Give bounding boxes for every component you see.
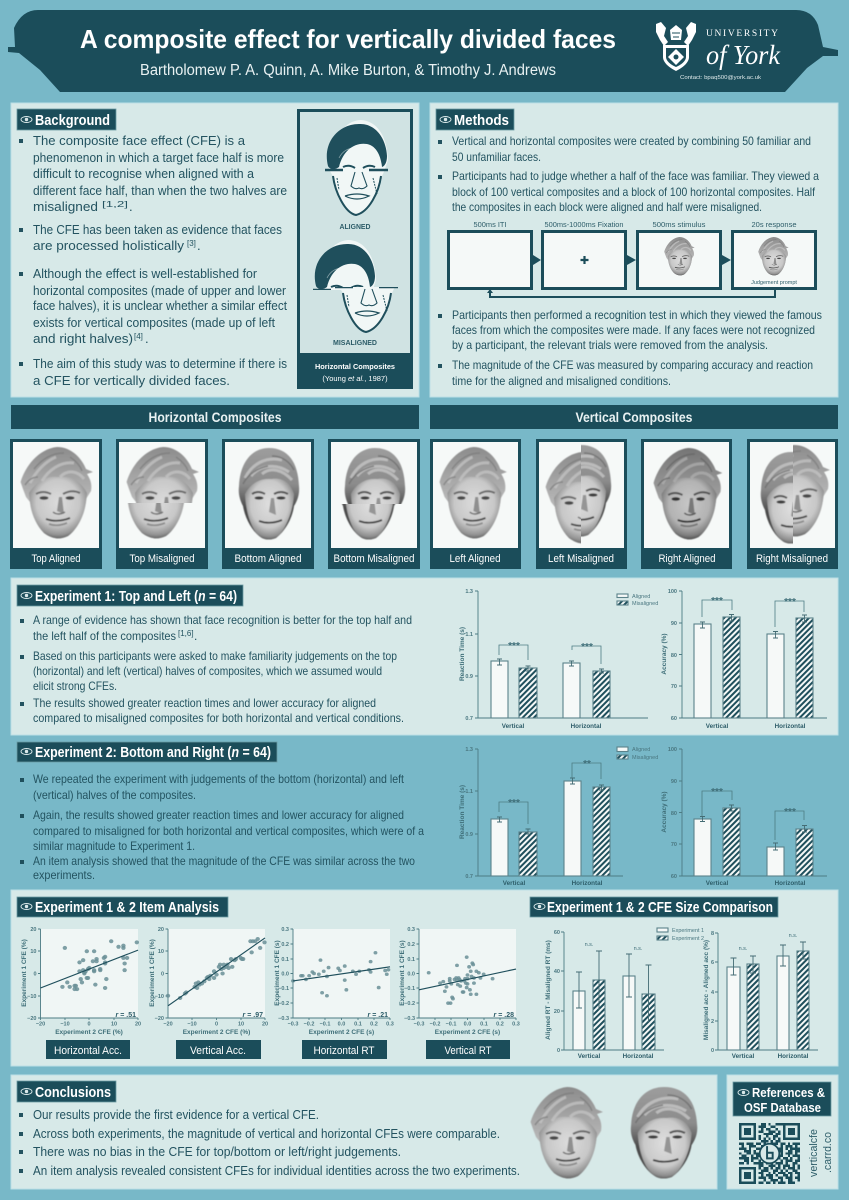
chart: CFE size accuracy: Misaligned acc - Aligned acc (%)	[703, 940, 710, 1040]
trial procedure diagram: Judgement prompt	[751, 280, 797, 286]
figure: Young et al. horizontal composites: MISALIGNED	[333, 338, 378, 347]
chart: CFE size accuracy: 4	[711, 990, 715, 996]
background bullets: misaligned	[33, 199, 98, 214]
background bullets: exists for vertical composites (made up of left	[33, 315, 275, 330]
chart: CFE size accuracy: n.s.	[739, 946, 748, 952]
scatter: vertical accuracy: −10	[155, 994, 164, 1000]
heading band: vertical composites: Vertical Composites	[576, 410, 692, 425]
chart: experiment 2 accuracy: Horizontal	[775, 880, 806, 887]
methods text lower	[438, 308, 822, 388]
chart: CFE size reaction time: Experiment 1	[672, 928, 704, 934]
panel: conclusions	[11, 1075, 717, 1189]
background bullets: difficult to recognise when aligned with a	[33, 166, 255, 181]
scatter: vertical RT: −0.3	[414, 1022, 424, 1028]
chart: experiment 1 accuracy: 60	[671, 716, 677, 722]
background bullets: [3]	[187, 239, 196, 248]
chart: experiment 2 reaction time: Reaction Time (s)	[459, 785, 466, 839]
logo: University of York: of York	[706, 40, 781, 70]
chart: CFE size reaction time: 40	[554, 969, 560, 975]
title: A composite effect for vertically divided faces	[80, 24, 616, 54]
label: vertical RT: Vertical RT	[444, 1045, 492, 1057]
chart: CFE size reaction time: n.s.	[585, 942, 594, 948]
chart: CFE size reaction time	[545, 928, 704, 1060]
tile: top misaligned: Top Misaligned	[130, 553, 194, 565]
chart: experiment 1 accuracy: Accuracy (%)	[661, 633, 668, 675]
background bullets: Although the effect is well-established for	[33, 266, 258, 281]
chart: CFE size reaction time: 20	[554, 1009, 560, 1015]
tile: top misaligned	[116, 439, 208, 569]
conclusions text	[19, 1107, 520, 1178]
background bullets: The composite face effect (CFE) is a	[33, 133, 246, 148]
experiment 1 text: elicit strong CFEs.	[33, 679, 117, 693]
scatter: horizontal RT	[274, 927, 394, 1036]
experiment 1 text: the left half of the composites	[33, 629, 176, 643]
scatter: vertical accuracy: −20	[163, 1022, 173, 1028]
background bullets: different face half, than when the two halves are	[33, 183, 287, 198]
methods text upper: the composites in each block were aligned and half were misaligned.	[452, 200, 762, 214]
chart: experiment 1 reaction time: ***	[508, 641, 520, 652]
chart: experiment 2 accuracy: 70	[671, 842, 677, 848]
chart: CFE size reaction time: n.s.	[634, 946, 643, 952]
label: horizontal RT	[302, 1040, 387, 1059]
panel: background	[11, 103, 419, 397]
chart: CFE size reaction time: 60	[554, 930, 560, 936]
heading: size comparison: Experiment 1 & 2 CFE Size Comparison	[547, 899, 773, 916]
logo: University of York: UNIVERSITY	[706, 29, 778, 39]
scatter: vertical RT: 0.0	[464, 1022, 471, 1028]
face: Boris	[531, 1087, 603, 1178]
methods text lower: by a participant, the relevant trials were removed from the analysis.	[452, 338, 768, 352]
scatter: vertical RT: 0.1	[480, 1022, 488, 1028]
scatter: vertical accuracy: 20	[262, 1022, 268, 1028]
chart: experiment 2 reaction time: Misaligned	[632, 755, 658, 761]
scatter: vertical RT: 0.0	[407, 972, 415, 978]
scatter: vertical RT: 0.3	[512, 1022, 520, 1028]
scatter: horizontal RT: 0.0	[338, 1022, 345, 1028]
heading: experiment 2: Experiment 2: Bottom and Right (n = 64)	[35, 744, 271, 761]
chart: experiment 2 reaction time: 0.7	[465, 874, 473, 880]
tile: right misaligned: Right Misaligned	[756, 553, 828, 565]
conclusions text: An item analysis revealed consistent CFEs for individual identities across the two experiments.	[33, 1163, 520, 1178]
heading band: horizontal composites: Horizontal Composites	[148, 410, 282, 425]
background bullets: [1,2]	[102, 200, 128, 209]
tile: left misaligned: Left Misaligned	[548, 553, 614, 565]
methods text upper	[438, 134, 819, 214]
chart: CFE size reaction time: Experiment 2	[672, 936, 704, 942]
chart: experiment 2 accuracy: 90	[671, 779, 677, 785]
heading: size comparison	[530, 897, 778, 917]
conclusions text: Our results provide the first evidence for a vertical CFE.	[33, 1107, 319, 1122]
scatter: vertical accuracy: r = .97	[243, 1012, 263, 1019]
chart: experiment 1 reaction time: Horizontal	[571, 723, 602, 730]
chart: CFE size accuracy: Horizontal	[778, 1053, 809, 1060]
heading band: vertical composites	[430, 405, 838, 429]
chart: experiment 2 reaction time	[459, 747, 658, 887]
chart: experiment 1 accuracy: 80	[671, 653, 677, 659]
background bullets: face halves), it is unclear whether a similar effect	[33, 298, 287, 313]
scatter: vertical accuracy	[149, 927, 268, 1036]
experiment 2 text	[20, 772, 424, 882]
experiment 1 text: Based on this participants were asked to make familiarity judgements on the top	[33, 649, 397, 663]
scatter: horizontal accuracy: 10	[30, 949, 36, 955]
label: vertical RT	[426, 1040, 510, 1059]
scatter: vertical RT: 0.2	[407, 942, 415, 948]
scatter: vertical RT: Experiment 1 CFE (s)	[399, 940, 406, 1006]
scatter: horizontal RT: 0.3	[386, 1022, 394, 1028]
chart: CFE size accuracy: 0	[711, 1048, 714, 1054]
chart: experiment 2 accuracy: ***	[784, 807, 796, 818]
sketch face: misaligned	[313, 237, 398, 335]
methods text lower: time for the aligned and misaligned conditions.	[452, 374, 671, 388]
background bullets: The CFE has been taken as evidence that faces	[33, 222, 282, 237]
chart: experiment 2 reaction time: Aligned	[632, 747, 650, 753]
experiment 1 text: .	[194, 629, 197, 643]
QR code	[739, 1124, 800, 1183]
tile: left misaligned	[536, 439, 627, 569]
figure: Young et al. horizontal composites	[297, 110, 413, 389]
scatter: horizontal accuracy: 0	[87, 1022, 91, 1028]
chart: experiment 1 accuracy: 90	[671, 621, 677, 627]
logo: University of York: Contact: bpaq500@york.ac.uk	[680, 75, 761, 81]
trial procedure diagram: 500ms-1000ms Fixation	[544, 222, 624, 229]
heading: item analysis	[17, 897, 228, 917]
scatter: horizontal RT: −0.3	[288, 1022, 298, 1028]
scatter: horizontal RT: −0.2	[304, 1022, 314, 1028]
trial procedure diagram	[448, 222, 816, 297]
tile: left aligned	[430, 439, 521, 569]
scatter: vertical RT: −0.3	[404, 1016, 415, 1022]
scatter: horizontal accuracy: Experiment 2 CFE (%)	[55, 1029, 123, 1036]
experiment 2 text: An item analysis showed that the magnitude of the CFE was similar across the two	[33, 854, 415, 868]
tile: right misaligned	[747, 439, 838, 569]
scatter: horizontal accuracy: −10	[27, 994, 36, 1000]
chart: CFE size reaction time: Horizontal	[623, 1053, 654, 1060]
panel: methods	[430, 103, 838, 397]
tile: right aligned	[641, 439, 732, 569]
tile: left aligned: Left Aligned	[450, 553, 500, 565]
authors: Bartholomew P. A. Quinn, A. Mike Burton, & Timothy J. Andrews	[140, 62, 556, 79]
scatter: horizontal accuracy: −20	[27, 1016, 36, 1022]
tile: bottom misaligned: Bottom Misaligned	[334, 553, 414, 565]
chart: experiment 1 accuracy: ***	[784, 597, 796, 608]
scatter: vertical RT: −0.2	[404, 1001, 415, 1007]
scatter: vertical RT: 0.1	[407, 957, 415, 963]
chart: experiment 1 reaction time: 1.3	[465, 589, 473, 595]
chart: experiment 2 accuracy: Vertical	[706, 880, 728, 887]
scatter: horizontal RT: Experiment 2 CFE (s)	[309, 1029, 374, 1036]
experiment 1 text: A range of evidence has shown that face recognition is better for the top half and	[33, 613, 412, 627]
chart: experiment 1 reaction time	[459, 589, 658, 730]
experiment 2 text: (vertical) halves of the composites.	[33, 788, 196, 802]
label: vertical accuracy	[176, 1040, 261, 1059]
link text: verticalcfe	[808, 1129, 820, 1177]
scatter: horizontal accuracy	[21, 927, 141, 1036]
heading: methods: Methods	[454, 112, 509, 129]
chart: experiment 2 reaction time: 1.3	[465, 747, 473, 753]
panel: item analysis and size comparison	[11, 890, 838, 1066]
chart: experiment 1 reaction time: Misaligned	[632, 601, 658, 607]
experiment 1 text: [1,6]	[178, 629, 194, 638]
tile: bottom misaligned	[328, 439, 420, 569]
methods text upper: 50 unfamiliar faces.	[452, 150, 541, 164]
tile: right aligned: Right Aligned	[658, 553, 716, 565]
background bullets: and right halves)	[33, 331, 133, 346]
tile: top aligned	[10, 439, 102, 569]
background bullets	[19, 133, 287, 388]
figure: Young et al. horizontal composites: (Young et al., 1987)	[322, 374, 388, 383]
chart: experiment 1 reaction time: Vertical	[502, 723, 524, 730]
logo: University of York	[656, 22, 781, 81]
link text	[808, 1129, 834, 1177]
chart: experiment 2 accuracy	[661, 747, 827, 887]
scatter: horizontal RT: r = .21	[368, 1012, 388, 1019]
chart: experiment 2 accuracy: 60	[671, 874, 677, 880]
face: Mark	[631, 1087, 697, 1178]
label: vertical accuracy: Vertical Acc.	[190, 1045, 246, 1057]
chart: CFE size accuracy: Vertical	[732, 1053, 754, 1060]
scatter: horizontal RT: 0.1	[354, 1022, 362, 1028]
chart: experiment 1 reaction time: 0.7	[465, 716, 473, 722]
chart: experiment 1 accuracy: ***	[711, 596, 723, 607]
scatter: vertical accuracy: −20	[155, 1016, 164, 1022]
scatter: horizontal RT: −0.1	[320, 1022, 330, 1028]
chart: experiment 2 reaction time: Horizontal	[572, 880, 603, 887]
chart: experiment 1 reaction time: ***	[581, 642, 593, 653]
scatter: vertical accuracy: 20	[158, 927, 164, 933]
heading: conclusions: Conclusions	[35, 1084, 111, 1101]
conclusions text: Across both experiments, the magnitude of vertical and horizontal CFEs were comparable.	[33, 1126, 500, 1141]
heading: item analysis: Experiment 1 & 2 Item Analysis	[35, 899, 219, 916]
scatter: vertical accuracy: 10	[238, 1022, 244, 1028]
experiment 2 text: We repeated the experiment with judgements of the bottom (horizontal) and left	[33, 772, 405, 786]
chart: experiment 1 accuracy: Horizontal	[775, 723, 806, 730]
scatter: horizontal RT: −0.1	[278, 986, 289, 992]
heading: methods	[436, 109, 514, 130]
heading: background: Background	[35, 112, 110, 129]
scatter: vertical RT: 0.3	[407, 927, 415, 933]
tile: top aligned: Top Aligned	[32, 553, 80, 565]
heading: experiment 1: Experiment 1: Top and Left (n = 64)	[35, 588, 237, 605]
scatter: vertical RT: −0.2	[430, 1022, 440, 1028]
chart: experiment 1 reaction time: 1.1	[465, 632, 473, 638]
heading: references	[733, 1082, 831, 1116]
experiment 1 text: The results showed greater reaction times and lower accuracy for aligned	[33, 696, 376, 710]
conclusions text: There was no bias in the CFE for top/bottom or left/right judgements.	[33, 1144, 401, 1159]
background bullets: horizontal composites (made of upper and lower	[33, 283, 287, 298]
tile: bottom aligned: Bottom Aligned	[234, 553, 302, 565]
chart: experiment 1 reaction time: Reaction Time (s)	[459, 627, 466, 681]
experiment 2 text: similar magnitude to Experiment 1.	[33, 839, 195, 853]
label: horizontal accuracy: Horizontal Acc.	[54, 1045, 122, 1057]
scatter: vertical RT: 0.2	[496, 1022, 504, 1028]
label: horizontal accuracy	[46, 1040, 130, 1059]
sketch face: aligned	[325, 120, 388, 215]
background bullets: .	[129, 199, 133, 214]
tile: bottom aligned	[222, 439, 314, 569]
figure: Young et al. horizontal composites: ALIGNED	[340, 222, 371, 231]
scatter: vertical RT: −0.1	[404, 986, 415, 992]
experiment 1 text: compared to misaligned composites for both horizontal and vertical conditions.	[33, 711, 404, 725]
chart: CFE size reaction time: Vertical	[578, 1053, 600, 1060]
background bullets: .	[145, 331, 149, 346]
experiment 2 text: compared to misaligned for both horizontal and vertical composites, which were of a	[33, 824, 424, 838]
scatter: horizontal accuracy: −20	[36, 1022, 45, 1028]
background bullets: a CFE for vertically divided faces.	[33, 373, 230, 388]
heading: references: OSF Database	[744, 1100, 821, 1115]
scatter: vertical RT: −0.1	[446, 1022, 456, 1028]
chart: experiment 1 accuracy: 100	[668, 589, 677, 595]
panel: references	[727, 1075, 838, 1189]
scatter: horizontal accuracy: 0	[33, 972, 36, 978]
heading: references: References &	[752, 1085, 825, 1100]
chart: CFE size accuracy: 2	[711, 1019, 714, 1025]
scatter: vertical accuracy: 0	[215, 1022, 218, 1028]
chart: experiment 2 reaction time: 0.9	[465, 832, 473, 838]
chart: CFE size accuracy: n.s.	[789, 933, 798, 939]
trial procedure diagram: 500ms stimulus	[652, 222, 706, 229]
chart: experiment 2 reaction time: 1.1	[465, 789, 473, 795]
background bullets: are processed holistically	[33, 238, 185, 253]
experiment 1 text: (horizontal) and left (vertical) halves of composites, which we assumed would	[33, 664, 382, 678]
header banner	[8, 10, 838, 92]
scatter: vertical RT	[399, 927, 520, 1036]
scatter: horizontal RT: 0.2	[281, 942, 289, 948]
section: experiment 2	[17, 742, 827, 887]
link text: .carrd.co	[822, 1132, 834, 1173]
chart: experiment 2 accuracy: 80	[671, 811, 677, 817]
chart: experiment 2 reaction time: **	[583, 759, 591, 770]
scatter: vertical accuracy: −10	[187, 1022, 197, 1028]
scatter: vertical accuracy: Experiment 2 CFE (%)	[183, 1029, 250, 1036]
experiment 1 text	[20, 613, 412, 725]
trial procedure diagram: 20s response	[752, 222, 797, 229]
scatter: vertical RT: r = .28	[494, 1012, 514, 1019]
scatter: horizontal accuracy: r = .51	[116, 1012, 136, 1019]
chart: experiment 1 accuracy: 70	[671, 684, 677, 690]
scatter: horizontal accuracy: 20	[30, 927, 36, 933]
heading: conclusions	[17, 1081, 116, 1102]
scatter: vertical accuracy: 0	[161, 972, 164, 978]
trial procedure diagram: 500ms ITI	[474, 222, 507, 229]
scatter: vertical RT: Experiment 2 CFE (s)	[435, 1029, 500, 1036]
scatter: horizontal RT: 0.0	[281, 972, 289, 978]
label: horizontal RT: Horizontal RT	[314, 1045, 375, 1057]
figure: Young et al. horizontal composites: Horizontal Composites	[315, 362, 395, 371]
scatter: vertical accuracy: 10	[158, 949, 164, 955]
scatter: horizontal RT: −0.2	[278, 1001, 289, 1007]
chart: CFE size accuracy: 8	[711, 931, 714, 937]
chart: experiment 1 reaction time: Aligned	[632, 594, 650, 600]
scatter: horizontal RT: 0.3	[281, 927, 289, 933]
chart: experiment 2 accuracy: 100	[668, 747, 677, 753]
background bullets: phenomenon in which a target face half is more	[33, 150, 284, 165]
background bullets: [4]	[134, 332, 143, 341]
scatter: horizontal accuracy: Experiment 1 CFE (%)	[21, 939, 28, 1007]
chart: experiment 1 accuracy	[661, 589, 827, 730]
scatter: horizontal accuracy: 10	[111, 1022, 117, 1028]
chart: CFE size reaction time: 0	[557, 1048, 560, 1054]
chart: CFE size reaction time: Aligned RT - Misaligned RT (ms)	[545, 940, 552, 1040]
heading band: horizontal composites	[11, 405, 419, 429]
chart: experiment 1 accuracy: Vertical	[706, 723, 728, 730]
chart: experiment 2 accuracy: ***	[711, 787, 723, 798]
chart: CFE size accuracy: 6	[711, 960, 714, 966]
heading: background	[17, 109, 116, 130]
scatter: vertical accuracy: Experiment 1 CFE (%)	[149, 939, 156, 1007]
background bullets: The aim of this study was to determine if there is	[33, 356, 287, 371]
panel: experiment 1	[11, 578, 838, 735]
chart: CFE size accuracy	[703, 931, 818, 1060]
scatter: horizontal RT: −0.3	[278, 1016, 289, 1022]
scatter: horizontal accuracy: 20	[135, 1022, 141, 1028]
chart: experiment 1 reaction time: 0.9	[465, 674, 473, 680]
experiment 2 text: experiments.	[33, 868, 95, 882]
background bullets: .	[197, 238, 201, 253]
scatter: horizontal RT: 0.1	[281, 957, 289, 963]
chart: experiment 2 reaction time: ***	[508, 798, 520, 809]
chart: experiment 2 reaction time: Vertical	[503, 880, 525, 887]
scatter: horizontal RT: 0.2	[370, 1022, 378, 1028]
chart: experiment 2 accuracy: Accuracy (%)	[661, 791, 668, 833]
experiment 2 text: Again, the results showed greater reaction times and lower accuracy for aligned	[33, 808, 404, 822]
scatter: horizontal RT: Experiment 1 CFE (s)	[274, 940, 281, 1006]
scatter: horizontal accuracy: −10	[60, 1022, 70, 1028]
